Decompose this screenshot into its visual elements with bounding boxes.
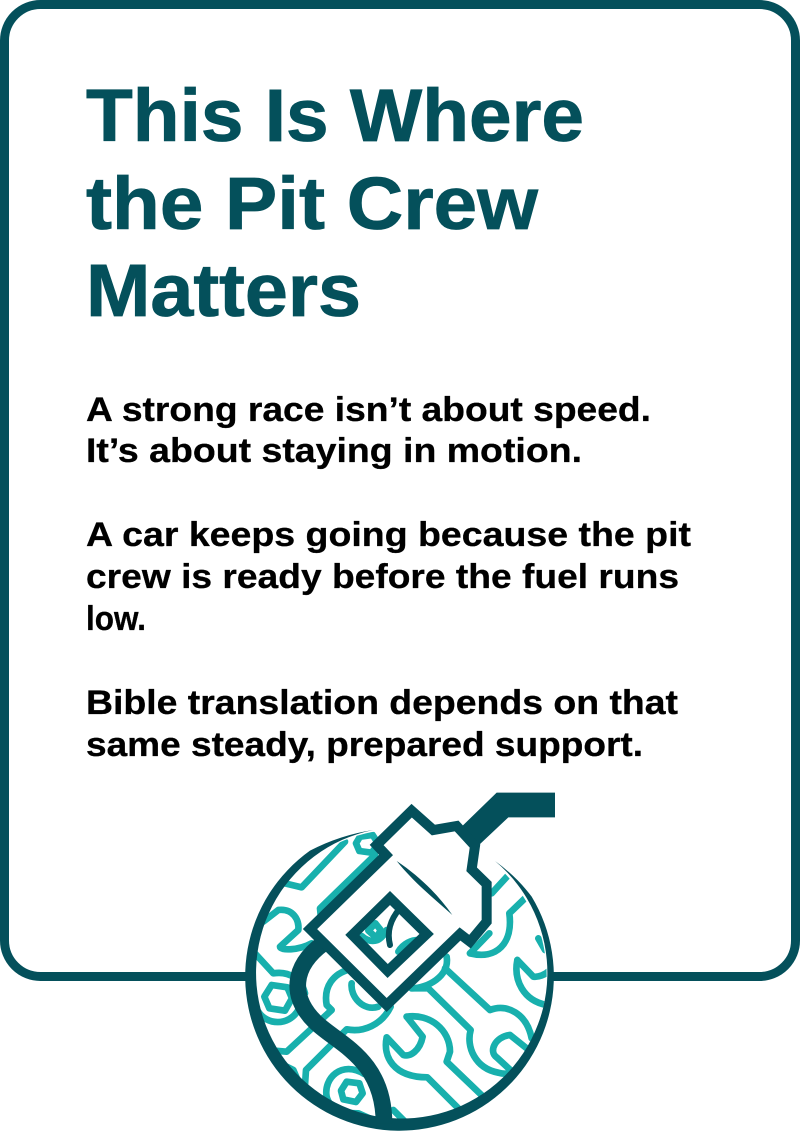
hose [298,943,384,1123]
text block: body copy: crew is ready before the fuel runs [86,558,679,596]
text block: body copy: Bible translation depends on that [86,684,678,722]
text block: body copy: same steady, prepared support. [86,726,643,764]
text block: body copy [86,391,691,764]
title: the Pit Crew [86,162,538,245]
window curve [389,908,400,945]
nozzle highlight [397,861,452,915]
wrench pattern [253,835,549,1125]
text block: body copy: A car keeps going because the pit [86,516,691,554]
title: This Is Where [86,74,584,157]
nozzle body [310,811,487,1005]
spout [462,793,555,846]
text block: body copy: A strong race isn’t about speed. [86,391,651,429]
icon: fuel nozzle in wrench circle [245,793,555,1131]
circle background [252,828,548,1124]
title: Matters [86,249,361,332]
text block: body copy: It’s about staying in motion. [86,432,582,470]
text block: body copy: low. [86,600,146,638]
circle ring [245,830,554,1131]
title [86,74,584,332]
